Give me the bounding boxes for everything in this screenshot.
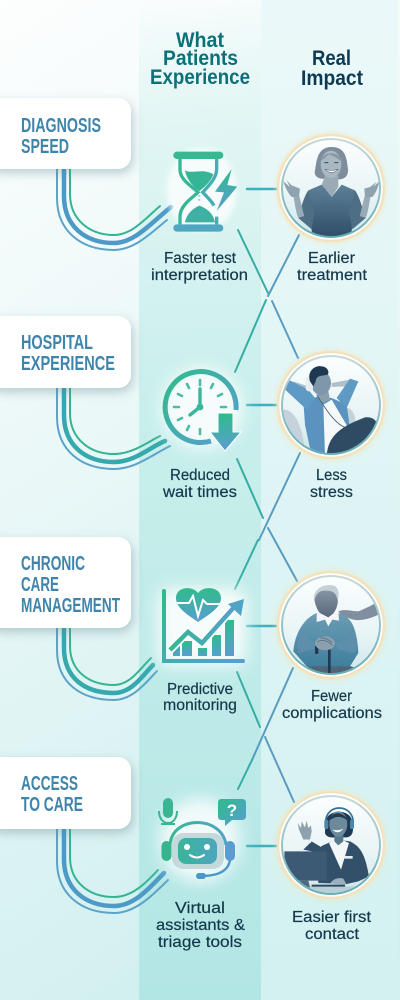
card: diagnosis speed	[0, 98, 131, 169]
label: reduced wait times	[162, 467, 237, 501]
crossing connector lines	[235, 189, 300, 846]
label: earlier treatment: Earlier	[308, 250, 355, 267]
label: virtual assistants and triage tools: triage tools	[158, 934, 242, 951]
label: fewer complications: complications	[282, 705, 382, 722]
card: chronic care management: CHRONIC	[21, 553, 85, 575]
connector curves: access to care	[57, 825, 168, 913]
card: access to care: TO CARE	[21, 794, 83, 816]
label: predictive monitoring	[163, 681, 237, 714]
icon: virtual assistant robot	[159, 798, 246, 882]
icon: clock with down arrow	[162, 368, 242, 451]
card: access to care	[0, 757, 131, 829]
label: virtual assistants and triage tools: Virtual	[175, 900, 225, 917]
card: diagnosis speed: SPEED	[21, 136, 69, 158]
label: fewer complications	[282, 688, 382, 722]
heading: what patients experience: Experience	[150, 66, 250, 89]
card: hospital experience: EXPERIENCE	[21, 353, 115, 375]
column: what patients experience	[139, 0, 261, 1000]
portrait: receptionist at desk, easier first contact	[275, 789, 387, 901]
label: faster test interpretation: Faster test	[164, 250, 237, 267]
card: chronic care management	[0, 537, 131, 628]
label: less stress: stress	[310, 484, 353, 501]
label: predictive monitoring: monitoring	[163, 697, 237, 714]
label: less stress: Less	[316, 467, 347, 484]
label: virtual assistants and triage tools	[156, 900, 246, 951]
portrait: elderly man with cane, fewer complications	[275, 569, 387, 681]
label: easier first contact: contact	[305, 926, 360, 943]
label: faster test interpretation: interpretation	[151, 267, 248, 284]
icon: hourglass with lightning bolt	[167, 148, 237, 232]
label: faster test interpretation	[151, 250, 248, 284]
heading: real impact: Impact	[301, 67, 363, 90]
card: hospital experience: HOSPITAL	[21, 332, 93, 354]
card: chronic care management: CARE	[21, 574, 59, 596]
card: hospital experience	[0, 316, 131, 388]
column: real impact	[261, 0, 398, 1000]
label: earlier treatment: treatment	[297, 267, 368, 284]
label: reduced wait times: wait times	[162, 484, 237, 501]
label: virtual assistants and triage tools: assistants &	[156, 917, 246, 934]
label: less stress	[310, 467, 353, 501]
label: earlier treatment	[297, 250, 368, 284]
heading: real impact: Real	[312, 47, 351, 70]
card: access to care: ACCESS	[21, 773, 78, 795]
label: predictive monitoring: Predictive	[167, 681, 233, 698]
icon: heart and rising chart	[158, 588, 246, 666]
connector curves: chronic care management	[57, 624, 157, 700]
label: easier first contact	[292, 909, 372, 943]
portrait: relaxed man, less stress	[275, 349, 387, 461]
label: reduced wait times: Reduced	[170, 467, 230, 484]
heading: what patients experience: What	[176, 29, 224, 52]
label: easier first contact: Easier first	[292, 909, 372, 926]
icon: virtual assistant robot: ?	[227, 801, 237, 820]
portrait: smiling woman, earlier treatment	[275, 132, 387, 244]
heading: what patients experience: Patients	[163, 47, 238, 70]
connector curves: diagnosis speed	[57, 165, 171, 250]
card: diagnosis speed: DIAGNOSIS	[21, 115, 101, 137]
heading: what patients experience	[150, 29, 250, 89]
heading: real impact	[301, 47, 363, 90]
label: fewer complications: Fewer	[311, 688, 352, 705]
card: chronic care management: MANAGEMENT	[21, 595, 120, 617]
connector curves: hospital experience	[57, 384, 170, 469]
